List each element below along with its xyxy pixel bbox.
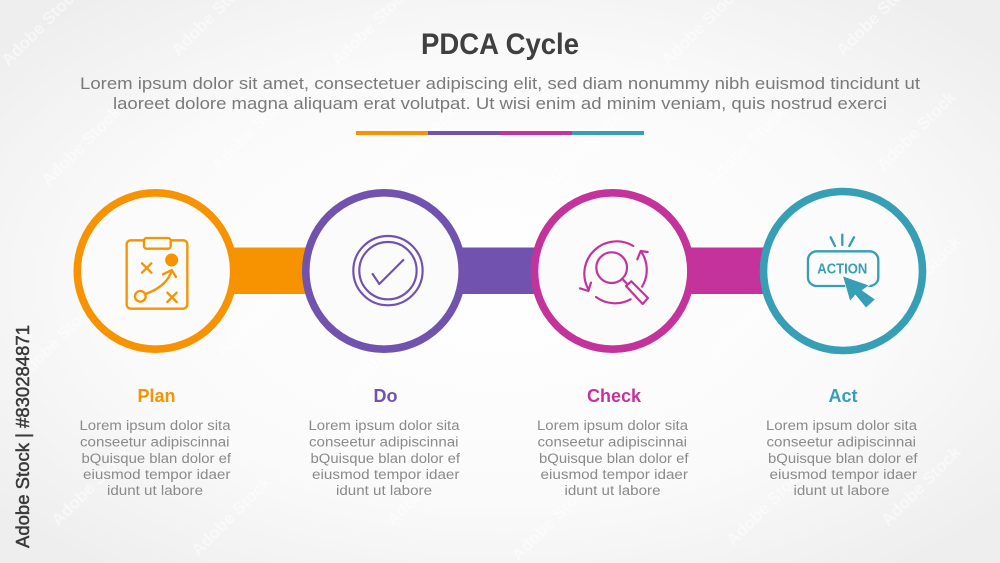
step circle: do [306, 193, 462, 349]
icon: action button with cursor [808, 235, 878, 308]
intro text: Lorem ipsum dolor sit amet, consectetuer adipiscing elit, sed diam nonummy nibh euismod tincidunt ut [80, 74, 920, 93]
heading: act: Act [828, 386, 858, 406]
description: act: idunt ut labore [794, 483, 890, 498]
infographic: Adobe Stock [373, 102, 460, 190]
infographic: Adobe Stock [723, 462, 810, 550]
infographic: Adobe Stock [383, 442, 470, 530]
infographic: Adobe Stock [543, 292, 630, 380]
heading: do: Do [374, 386, 398, 406]
step circle: act [764, 192, 922, 350]
description: plan: Lorem ipsum dolor sita [80, 418, 231, 433]
title: PDCA Cycle [421, 28, 579, 61]
stock id side label: Adobe Stock | #830284871 [12, 325, 33, 548]
step circle: plan [77, 193, 234, 349]
infographic: Adobe Stock [188, 472, 275, 560]
heading: plan: Plan [137, 386, 176, 406]
intro text [80, 74, 920, 113]
description: check: idunt ut labore [564, 483, 660, 498]
description: plan: conseetur adipiscinnai [80, 434, 230, 450]
icon: magnifier with cycle arrows [580, 241, 648, 304]
step text: do [308, 386, 460, 498]
description: plan: eiusmod tempor idaer [83, 467, 231, 482]
infographic: Adobe Stock [703, 102, 790, 190]
description: act: Lorem ipsum dolor sita [766, 418, 918, 433]
intro text: laoreet dolore magna aliquam erat volutpat. Ut wisi enim ad minim veniam, quis nostrud exerci [113, 94, 887, 113]
description: plan: idunt ut labore [107, 483, 203, 498]
icon: check mark in double ring [353, 236, 423, 305]
description: act: bQuisque blan dolor ef [768, 451, 918, 466]
description: do: conseetur adipiscinnai [309, 434, 458, 450]
infographic: Adobe Stock [208, 87, 295, 175]
infographic: Adobe Stock [508, 477, 595, 563]
description: do: bQuisque blan dolor ef [310, 451, 460, 466]
connector bars [230, 248, 768, 294]
infographic: Adobe Stock [38, 102, 125, 190]
description: do: eiusmod tempor idaer [312, 467, 460, 482]
infographic: Adobe Stock [538, 107, 625, 195]
infographic: Adobe Stock [878, 232, 965, 320]
divider: four colour segments [356, 131, 644, 135]
description: act: eiusmod tempor idaer [770, 467, 918, 482]
infographic: Adobe Stock [878, 442, 965, 530]
description: do: idunt ut labore [336, 483, 432, 498]
step circle: check [534, 193, 691, 349]
step text: act [766, 386, 918, 498]
description: act: conseetur adipiscinnai [766, 434, 916, 450]
infographic: Adobe Stock [343, 307, 430, 395]
description: check: conseetur adipiscinnai [538, 434, 687, 450]
description: check [537, 418, 689, 498]
description: plan [80, 418, 231, 498]
infographic: Adobe Stock [873, 87, 960, 175]
description: check: Lorem ipsum dolor sita [537, 418, 689, 433]
description: do [308, 418, 460, 498]
icon: action button with cursor: ACTION [817, 261, 867, 277]
description: act [766, 418, 918, 498]
heading: check: Check [587, 386, 642, 406]
description: plan: bQuisque blan dolor ef [82, 451, 231, 466]
description: check: eiusmod tempor idaer [540, 467, 689, 482]
infographic: Adobe Stock [13, 297, 100, 385]
icon: clipboard with play diagram [127, 238, 187, 309]
step text: check [537, 386, 689, 498]
infographic: Adobe Stock [213, 272, 300, 360]
description: check: bQuisque blan dolor ef [539, 451, 689, 466]
infographic: Adobe Stock [708, 272, 795, 360]
description: do: Lorem ipsum dolor sita [308, 418, 460, 433]
infographic: Adobe Stock [48, 442, 135, 530]
step text: plan [80, 386, 231, 498]
